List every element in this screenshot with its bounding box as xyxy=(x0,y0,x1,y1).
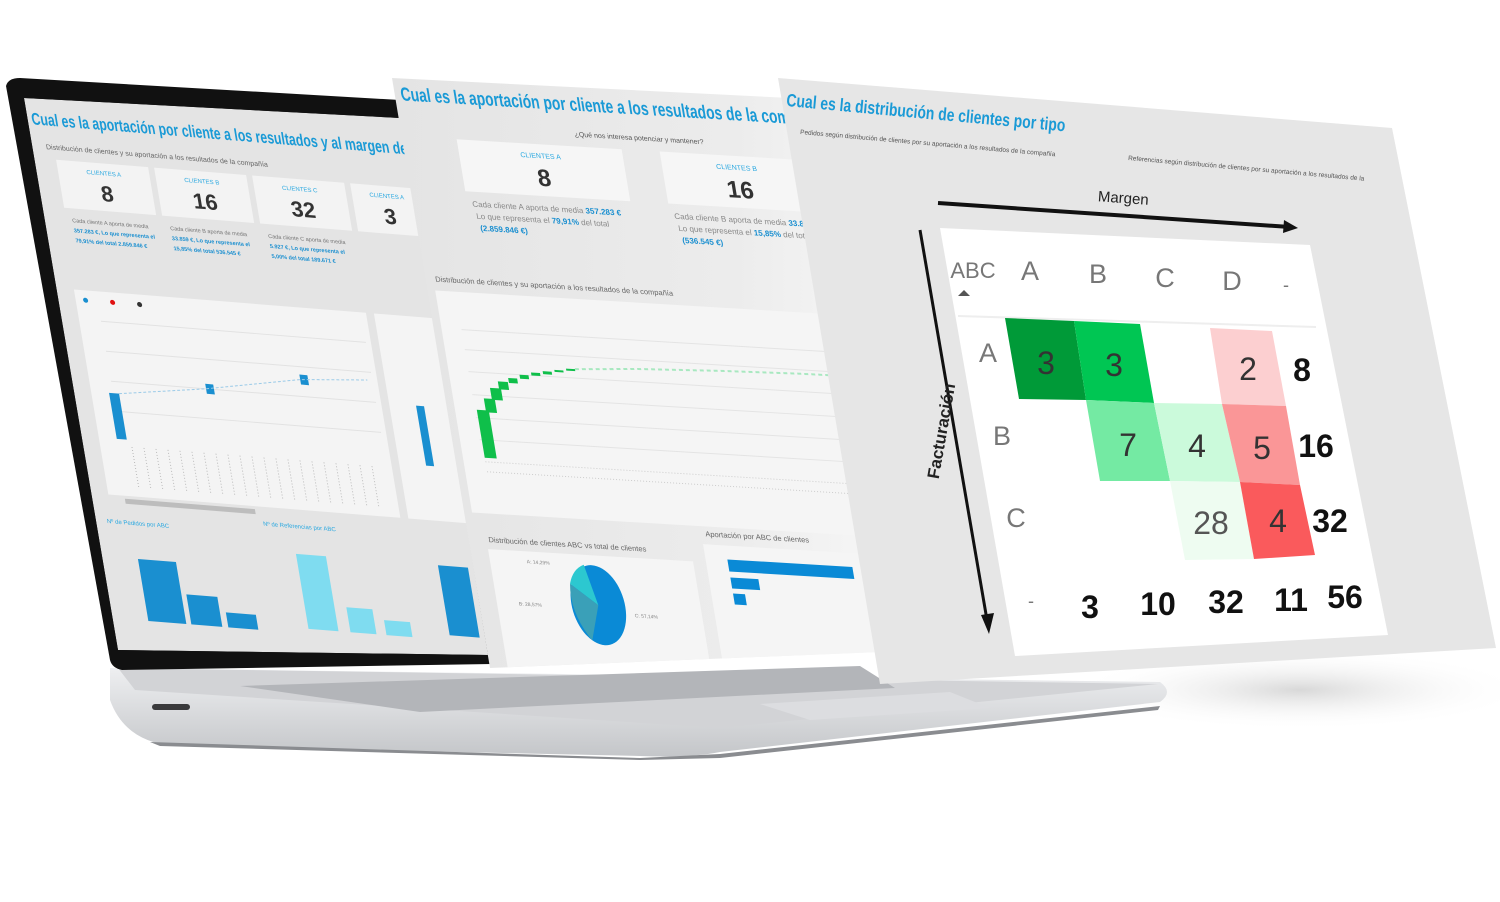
laptop base xyxy=(110,666,1167,760)
heatmap matrix: 3 xyxy=(1081,589,1099,625)
heatmap matrix xyxy=(940,228,1388,656)
heatmap matrix: 56 xyxy=(1327,579,1363,615)
heatmap matrix: 4 xyxy=(1188,428,1206,464)
right subtitles: Referencias según distribución de clientes por su aportación a los resultados de la xyxy=(1128,155,1365,183)
heatmap labels: A xyxy=(1021,256,1039,286)
heatmap labels: C xyxy=(1006,503,1026,533)
right subtitles xyxy=(800,129,1365,183)
heatmap matrix: 5 xyxy=(1253,430,1271,466)
heatmap matrix: 11 xyxy=(1274,582,1308,618)
middle KPI cards: (2.859.846 €) xyxy=(480,224,529,236)
laptop KPI cards: 8 xyxy=(99,181,115,207)
heatmap labels xyxy=(950,256,1289,533)
laptop waterfall chart xyxy=(74,289,490,533)
laptop KPI cards: 5.927 €, Lo que representa el xyxy=(270,244,346,256)
heatmap matrix: 3 xyxy=(1037,345,1055,381)
middle pie chart: Distribución de clientes ABC vs total de clientes xyxy=(488,535,647,554)
middle KPI cards: CLIENTES A xyxy=(520,152,562,161)
middle pie chart: C: 57,14% xyxy=(634,613,659,621)
heatmap matrix: 32 xyxy=(1208,584,1244,620)
middle KPI cards: Lo que representa el 79,91% del total xyxy=(476,212,610,229)
arrow: Facturación: Facturación xyxy=(924,382,959,480)
middle title: Cual es la aportación por cliente a los resultados de la compañía xyxy=(399,84,828,131)
heatmap labels: C xyxy=(1155,263,1175,293)
heatmap labels: D xyxy=(1222,266,1242,296)
heatmap matrix: 3 xyxy=(1105,347,1123,383)
laptop KPI cards: Cada cliente C aporta de media xyxy=(268,234,347,246)
middle KPI cards: CLIENTES B xyxy=(716,164,758,173)
laptop screen xyxy=(24,98,488,655)
heatmap matrix: 4 xyxy=(1269,503,1287,539)
heatmap labels: - xyxy=(1283,275,1289,295)
laptop KPI cards: 79,91% del total 2.859.846 € xyxy=(75,238,148,250)
panel: middle dashboard: ¿Qué nos interesa potenciar y mantener? xyxy=(574,132,704,146)
laptop KPI cards: Cada cliente A aporta de media xyxy=(72,218,150,230)
arrow: Margen xyxy=(938,188,1298,233)
laptop KPI cards: CLIENTES A xyxy=(369,193,406,202)
heatmap matrix: 2 xyxy=(1239,351,1257,387)
middle horizontal bar chart xyxy=(704,531,854,658)
heatmap matrix: 16 xyxy=(1298,428,1334,464)
middle KPI cards: (536.545 €) xyxy=(682,236,724,247)
laptop KPI cards: 15,85% del total 536.545 € xyxy=(173,246,241,257)
middle KPI cards: Lo que representa el 15,85% del total xyxy=(678,224,812,241)
laptop screen: Distribución de clientes y su aportación a los resultados de la compañía xyxy=(46,144,269,169)
heatmap labels: ABC xyxy=(950,258,996,283)
laptop KPI cards: 33.859 €, Lo que representa el xyxy=(172,236,251,248)
laptop KPI cards: CLIENTES A xyxy=(86,170,123,179)
laptop KPI cards: 3 xyxy=(382,204,398,230)
laptop KPI cards: 357.283 €, Lo que representa el xyxy=(74,228,156,241)
heatmap cells xyxy=(1005,318,1086,400)
heatmap matrix: 10 xyxy=(1140,586,1176,622)
arrow: Margen: Margen xyxy=(1097,188,1149,209)
laptop KPI cards: CLIENTES B xyxy=(184,178,220,187)
laptop bottom bar charts: Nº de Pedidos por ABC xyxy=(106,518,170,530)
middle waterfall chart xyxy=(435,276,848,528)
panel: right heatmap dashboard xyxy=(778,78,1496,684)
laptop KPI cards xyxy=(56,160,418,263)
laptop xyxy=(6,78,1167,760)
heatmap matrix: 7 xyxy=(1119,427,1137,463)
laptop KPI cards: 16 xyxy=(191,188,220,215)
middle KPI cards: Cada cliente A aporta de media 357.283 € xyxy=(472,200,622,218)
laptop KPI cards: 32 xyxy=(289,196,318,223)
heatmap matrix: 8 xyxy=(1293,352,1311,388)
right title: Cual es la distribución de clientes por tipo xyxy=(786,90,1066,135)
heatmap labels: B xyxy=(1089,259,1107,289)
middle KPI cards xyxy=(456,140,805,247)
shadow under right panel xyxy=(1070,650,1500,730)
middle KPI cards: Cada cliente B aporta de media 33.859 € xyxy=(674,212,821,229)
laptop KPI cards: 5,00% del total 189.671 € xyxy=(271,254,336,265)
laptop KPI cards: Cada cliente B aporta de media xyxy=(170,226,249,238)
arrow: Facturación xyxy=(920,230,994,634)
middle KPI cards: 16 xyxy=(725,176,756,205)
middle pie chart: B: 28,57% xyxy=(518,601,543,609)
laptop bottom bar charts: Nº de Referencias por ABC xyxy=(263,521,337,533)
heatmap matrix: 32 xyxy=(1312,503,1348,539)
panel: middle dashboard xyxy=(392,78,874,668)
middle KPI cards: 8 xyxy=(535,165,553,193)
heatmap matrix: 28 xyxy=(1193,505,1229,541)
middle pie chart: A: 14,29% xyxy=(526,559,551,567)
middle waterfall chart: Distribución de clientes y su aportación a los resultados de la compañía xyxy=(435,275,675,298)
middle pie chart xyxy=(488,537,709,667)
laptop bottom bar charts xyxy=(107,518,480,638)
right subtitles: Pedidos según distribución de clientes por su aportación a los resultados de la compañía xyxy=(800,129,1056,158)
heatmap matrix: - xyxy=(1028,591,1034,611)
heatmap labels: B xyxy=(993,421,1011,451)
laptop bezel xyxy=(6,78,492,670)
heatmap labels: A xyxy=(979,338,997,368)
laptop title: Cual es la aportación por cliente a los resultados y al margen de la compañía xyxy=(30,108,483,164)
middle horizontal bar chart: Aportación por ABC de clientes xyxy=(705,529,810,545)
laptop KPI cards: CLIENTES C xyxy=(282,186,319,195)
